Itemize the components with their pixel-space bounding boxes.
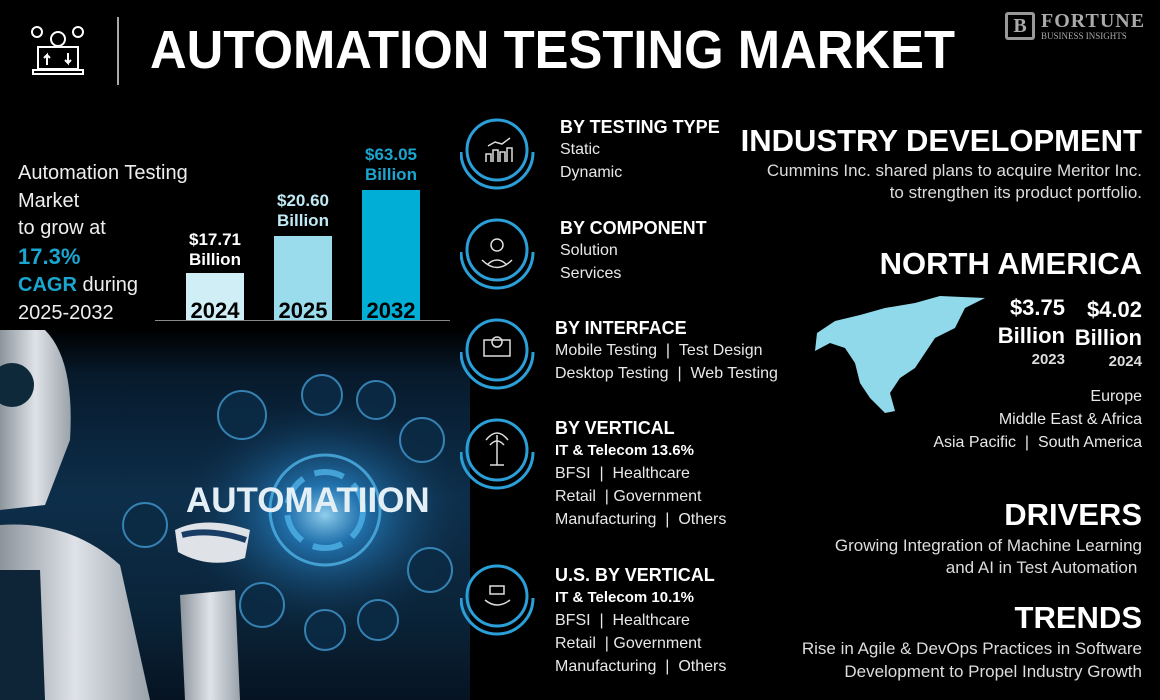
other regions: Europe	[1090, 388, 1142, 405]
map	[815, 296, 985, 413]
segment texts	[560, 117, 720, 181]
text: Manufacturing | Others	[555, 658, 726, 675]
logo	[1005, 10, 1145, 41]
segment texts: Static	[560, 141, 600, 158]
trends: TRENDS	[1015, 600, 1142, 635]
trends: Development to Propel Industry Growth	[844, 662, 1142, 681]
segment circles	[460, 118, 534, 636]
bar chart: $20.60	[277, 191, 329, 210]
bar chart: $63.05	[365, 145, 417, 164]
industry development: INDUSTRY DEVELOPMENT	[741, 123, 1142, 158]
CAGR text: 17.3%	[18, 244, 80, 268]
drivers: and AI in Test Automation	[946, 558, 1137, 577]
CAGR text: to grow at	[18, 217, 106, 239]
CAGR text: CAGR during	[18, 274, 138, 296]
bar chart: Billion	[277, 211, 329, 230]
text: Mobile Testing | Test Design	[555, 342, 763, 359]
text: BY COMPONENT	[560, 218, 707, 238]
hero image: robot with automation text	[0, 330, 470, 700]
robot arm	[180, 590, 240, 700]
text: BY VERTICAL	[555, 418, 675, 438]
text: BY INTERFACE	[555, 318, 687, 338]
text: Billion	[1075, 325, 1142, 350]
text: Services	[560, 265, 621, 282]
CAGR text: 2025-2032	[18, 302, 114, 324]
segment texts: BY TESTING TYPE	[560, 117, 720, 137]
text: BFSI | Healthcare	[555, 612, 690, 629]
trends	[802, 600, 1142, 681]
other regions: Asia Pacific | South America	[933, 434, 1142, 451]
logo: FORTUNE	[1041, 10, 1145, 32]
bar chart: Billion	[365, 165, 417, 184]
text: Solution	[560, 242, 618, 259]
bar chart: 2032	[367, 298, 415, 323]
text: IT & Telecom 13.6%	[555, 442, 694, 459]
text: IT & Telecom 10.1%	[555, 589, 694, 606]
industry development: to strengthen its product portfolio.	[890, 183, 1142, 202]
industry development: Cummins Inc. shared plans to acquire Meritor Inc.	[767, 161, 1142, 180]
drivers: Growing Integration of Machine Learning	[835, 536, 1142, 555]
bar chart: $17.71	[189, 230, 241, 249]
text: Retail | Government	[555, 635, 701, 652]
text: Retail | Government	[555, 488, 701, 505]
bar chart: 2024	[191, 298, 239, 323]
segment texts: Dynamic	[560, 164, 622, 181]
logo: B	[1013, 15, 1027, 37]
hero image: robot with automation text: AUTOMATIION	[186, 481, 430, 520]
text: Manufacturing | Others	[555, 511, 726, 528]
bar chart: Billion	[189, 250, 241, 269]
north america: NORTH AMERICA	[880, 246, 1142, 281]
header icon	[31, 26, 84, 75]
text: Desktop Testing | Web Testing	[555, 365, 778, 382]
text: 2023	[1032, 351, 1065, 368]
drivers: DRIVERS	[1004, 497, 1142, 532]
CAGR text	[18, 162, 188, 324]
other regions: Middle East & Africa	[999, 411, 1142, 428]
text: $3.75	[1010, 295, 1065, 320]
robot body	[0, 524, 150, 700]
text: $4.02	[1087, 297, 1142, 322]
logo: BUSINESS INSIGHTS	[1041, 31, 1127, 41]
text: Billion	[998, 323, 1065, 348]
bar chart: 2025	[279, 298, 327, 323]
CAGR text: Market	[18, 190, 79, 212]
robot head	[0, 330, 71, 510]
text: 2024	[1109, 353, 1142, 370]
other regions	[933, 388, 1142, 451]
text: BFSI | Healthcare	[555, 465, 690, 482]
CAGR text: Automation Testing	[18, 162, 188, 184]
text: U.S. BY VERTICAL	[555, 565, 715, 585]
drivers	[835, 497, 1142, 577]
bar chart	[155, 145, 450, 323]
industry development	[741, 123, 1142, 202]
trends: Rise in Agile & DevOps Practices in Software	[802, 639, 1142, 658]
